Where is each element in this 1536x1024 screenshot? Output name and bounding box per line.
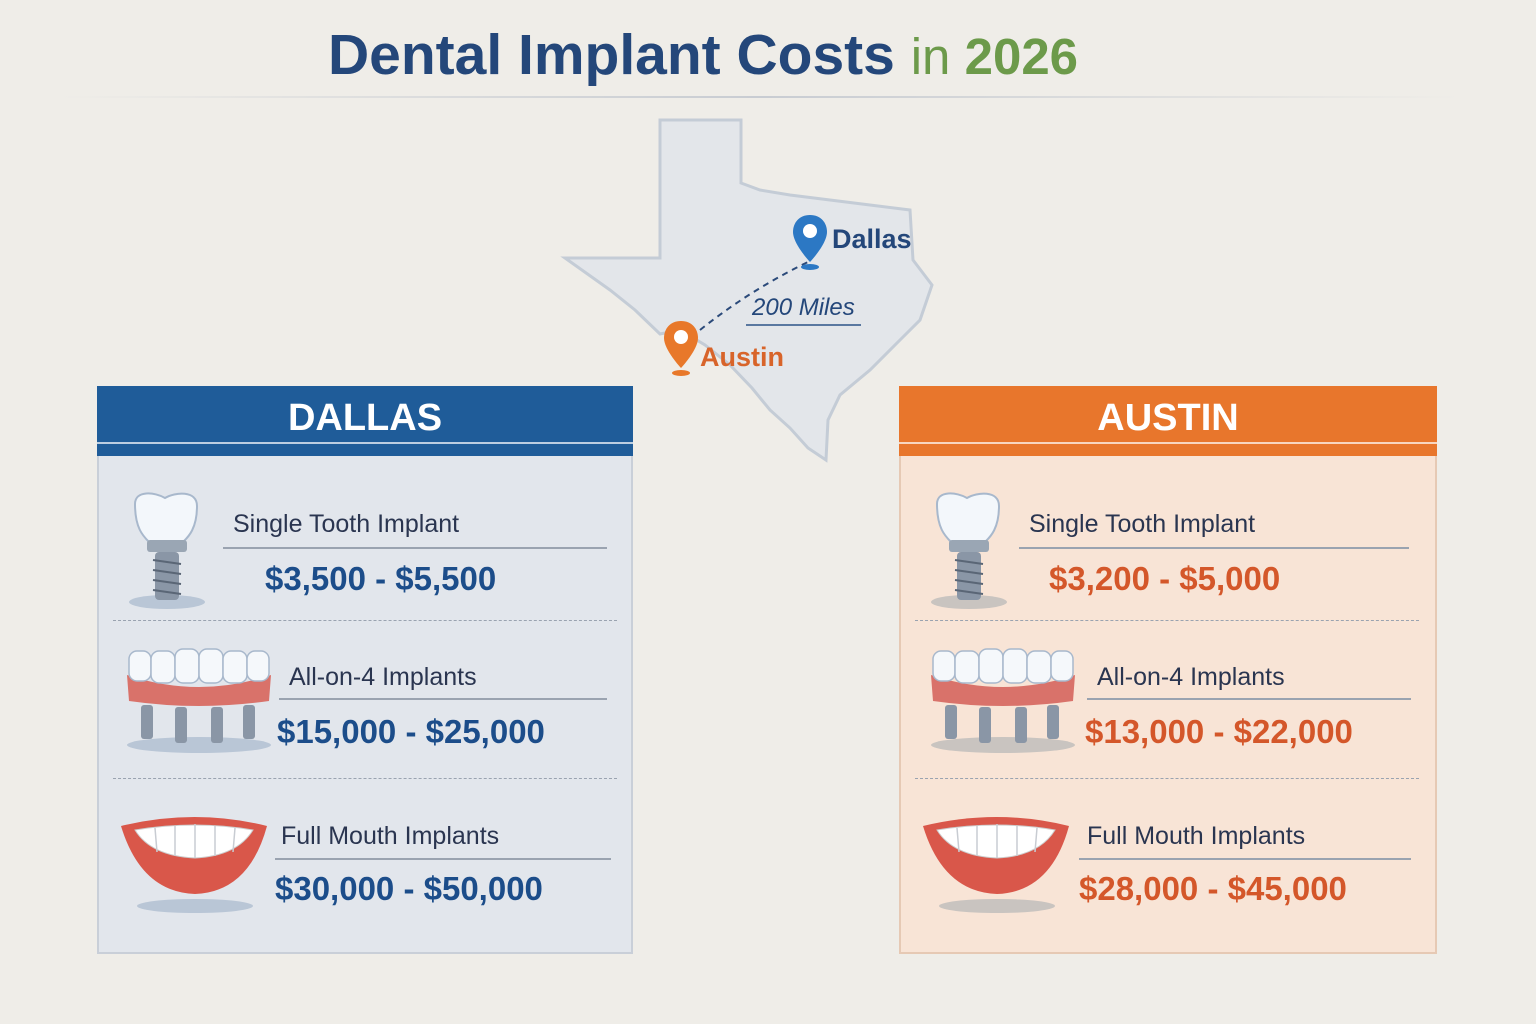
row: single tooth [931, 492, 1409, 609]
icon: smile [923, 817, 1069, 913]
label: Single Tooth Implant: Single Tooth Implant [233, 510, 459, 538]
row: all-on-4 [931, 648, 1411, 753]
label: All-on-4: All-on-4 Implants [1097, 663, 1285, 691]
header: Austin [899, 386, 1437, 456]
pin: Austin [664, 321, 698, 376]
price: $30,000 - $50,000 [275, 870, 543, 907]
header: Dallas: DALLAS [288, 397, 442, 439]
label: 200 Miles: 200 Miles [752, 294, 855, 321]
label: Full Mouth: Full Mouth Implants [1087, 822, 1305, 850]
title: Dental Implant Costs in 2026 [328, 23, 1078, 87]
icon: all-on-4 [127, 648, 271, 753]
price: $3,500 - $5,500 [265, 560, 496, 597]
row: single tooth [129, 492, 607, 609]
label: Full Mouth: Full Mouth Implants [281, 822, 499, 850]
price: $13,000 - $22,000 [1085, 713, 1353, 750]
panel: Dallas [97, 386, 633, 954]
header: Dallas [97, 386, 633, 456]
row: full mouth [923, 817, 1411, 913]
row: all-on-4 [127, 648, 607, 753]
price: $28,000 - $45,000 [1079, 870, 1347, 907]
icon: tooth implant [931, 492, 1007, 609]
pin: Dallas [793, 215, 827, 270]
row: full mouth [121, 817, 611, 913]
icon: all-on-4 [931, 648, 1075, 753]
header: Austin: AUSTIN [1097, 397, 1239, 439]
icon: tooth implant [129, 492, 205, 609]
label: Dallas: Dallas [832, 224, 912, 254]
price: $3,200 - $5,000 [1049, 560, 1280, 597]
panel: Austin [899, 386, 1437, 954]
label: All-on-4: All-on-4 Implants [289, 663, 477, 691]
label: Austin: Austin [700, 342, 784, 372]
label: Single Tooth Implant: Single Tooth Implant [1029, 510, 1255, 538]
price: $15,000 - $25,000 [277, 713, 545, 750]
icon: smile [121, 817, 267, 913]
